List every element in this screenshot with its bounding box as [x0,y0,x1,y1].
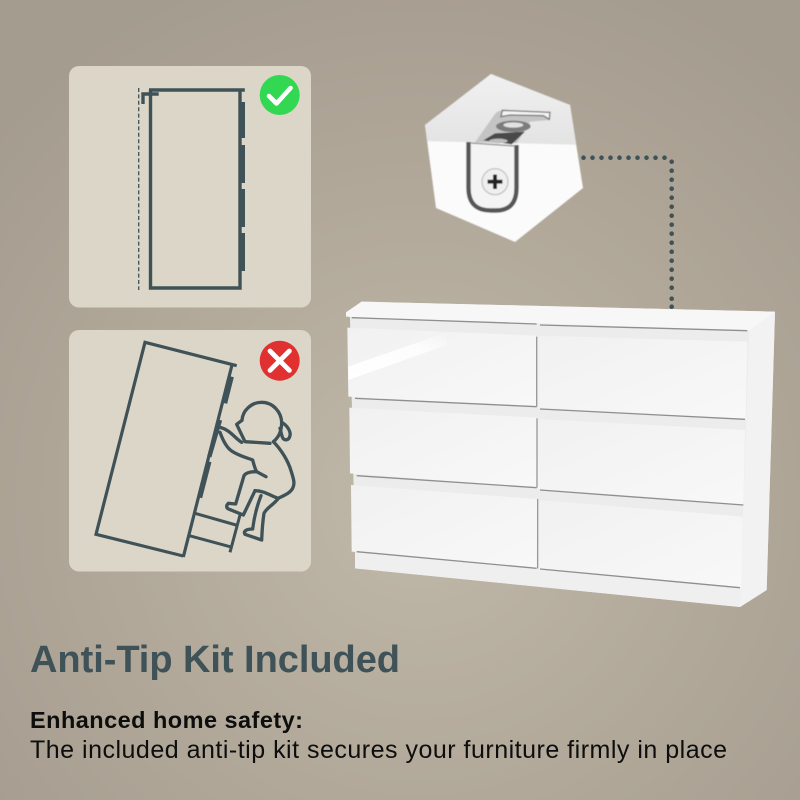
icon: red cross [260,341,300,381]
panel: unsafe tipping furniture [69,330,311,572]
connector: dotted line from bracket to dresser [581,155,674,309]
icon: climbing child [220,402,294,540]
text: subheading: Enhanced home safety: [30,707,303,733]
dresser: white six-drawer chest [346,302,775,607]
icon: wall dashed line [138,88,140,290]
text: description: The included anti-tip kit secures your furniture firmly in place [30,736,727,764]
icon: furniture side view [143,90,245,288]
dresser carcass [346,302,775,607]
icon: green check [260,75,300,115]
drawer gaps [352,318,747,588]
icon: bracket U plate with screw [468,142,516,210]
drawer gloss highlight [348,332,447,380]
icon: bracket top plate [475,110,550,144]
panel: correct anchored furniture [69,66,311,308]
icon: tipping furniture [96,342,240,557]
title: Anti-Tip Kit Included [30,639,400,681]
drawer fronts [347,328,747,588]
callout: bracket hexagon [420,70,590,245]
